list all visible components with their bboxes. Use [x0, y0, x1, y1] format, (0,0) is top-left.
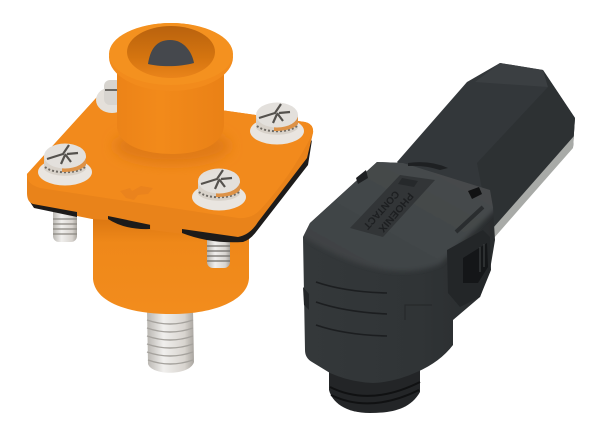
top flange — [109, 23, 233, 91]
side latch — [447, 230, 491, 307]
logo mark — [398, 178, 418, 187]
logo text: PHOENIX — [376, 190, 415, 234]
housing top face — [303, 162, 493, 272]
logo text second line: CONTACT — [361, 188, 401, 231]
top notch — [408, 162, 448, 170]
lower cylinder body — [93, 212, 249, 314]
side ridge — [456, 207, 483, 232]
neck — [117, 70, 224, 154]
cable sleeve — [397, 63, 575, 238]
mounting plate — [27, 94, 313, 237]
threaded stud — [147, 310, 194, 373]
grip ridges — [316, 282, 387, 336]
square hole — [468, 187, 482, 199]
housing seam right — [405, 305, 432, 320]
screw front left — [38, 144, 92, 186]
logo plate — [350, 175, 435, 237]
neck shadow on plate — [114, 128, 230, 164]
side slot — [356, 170, 368, 184]
main housing — [303, 162, 495, 383]
threaded bottom — [329, 365, 420, 413]
embossed cross logo — [120, 186, 153, 200]
screw back right — [250, 102, 304, 144]
screw front right — [192, 168, 246, 210]
orange panel-mount connector — [27, 23, 313, 373]
black gasket under plate — [30, 140, 312, 242]
rear screw stud left — [53, 205, 77, 242]
black angled connector — [296, 63, 575, 413]
socket opening — [127, 26, 215, 78]
rear screw stud right — [207, 232, 230, 268]
screw back left — [96, 80, 128, 113]
housing seam left — [303, 287, 309, 310]
contact pin — [148, 40, 194, 66]
